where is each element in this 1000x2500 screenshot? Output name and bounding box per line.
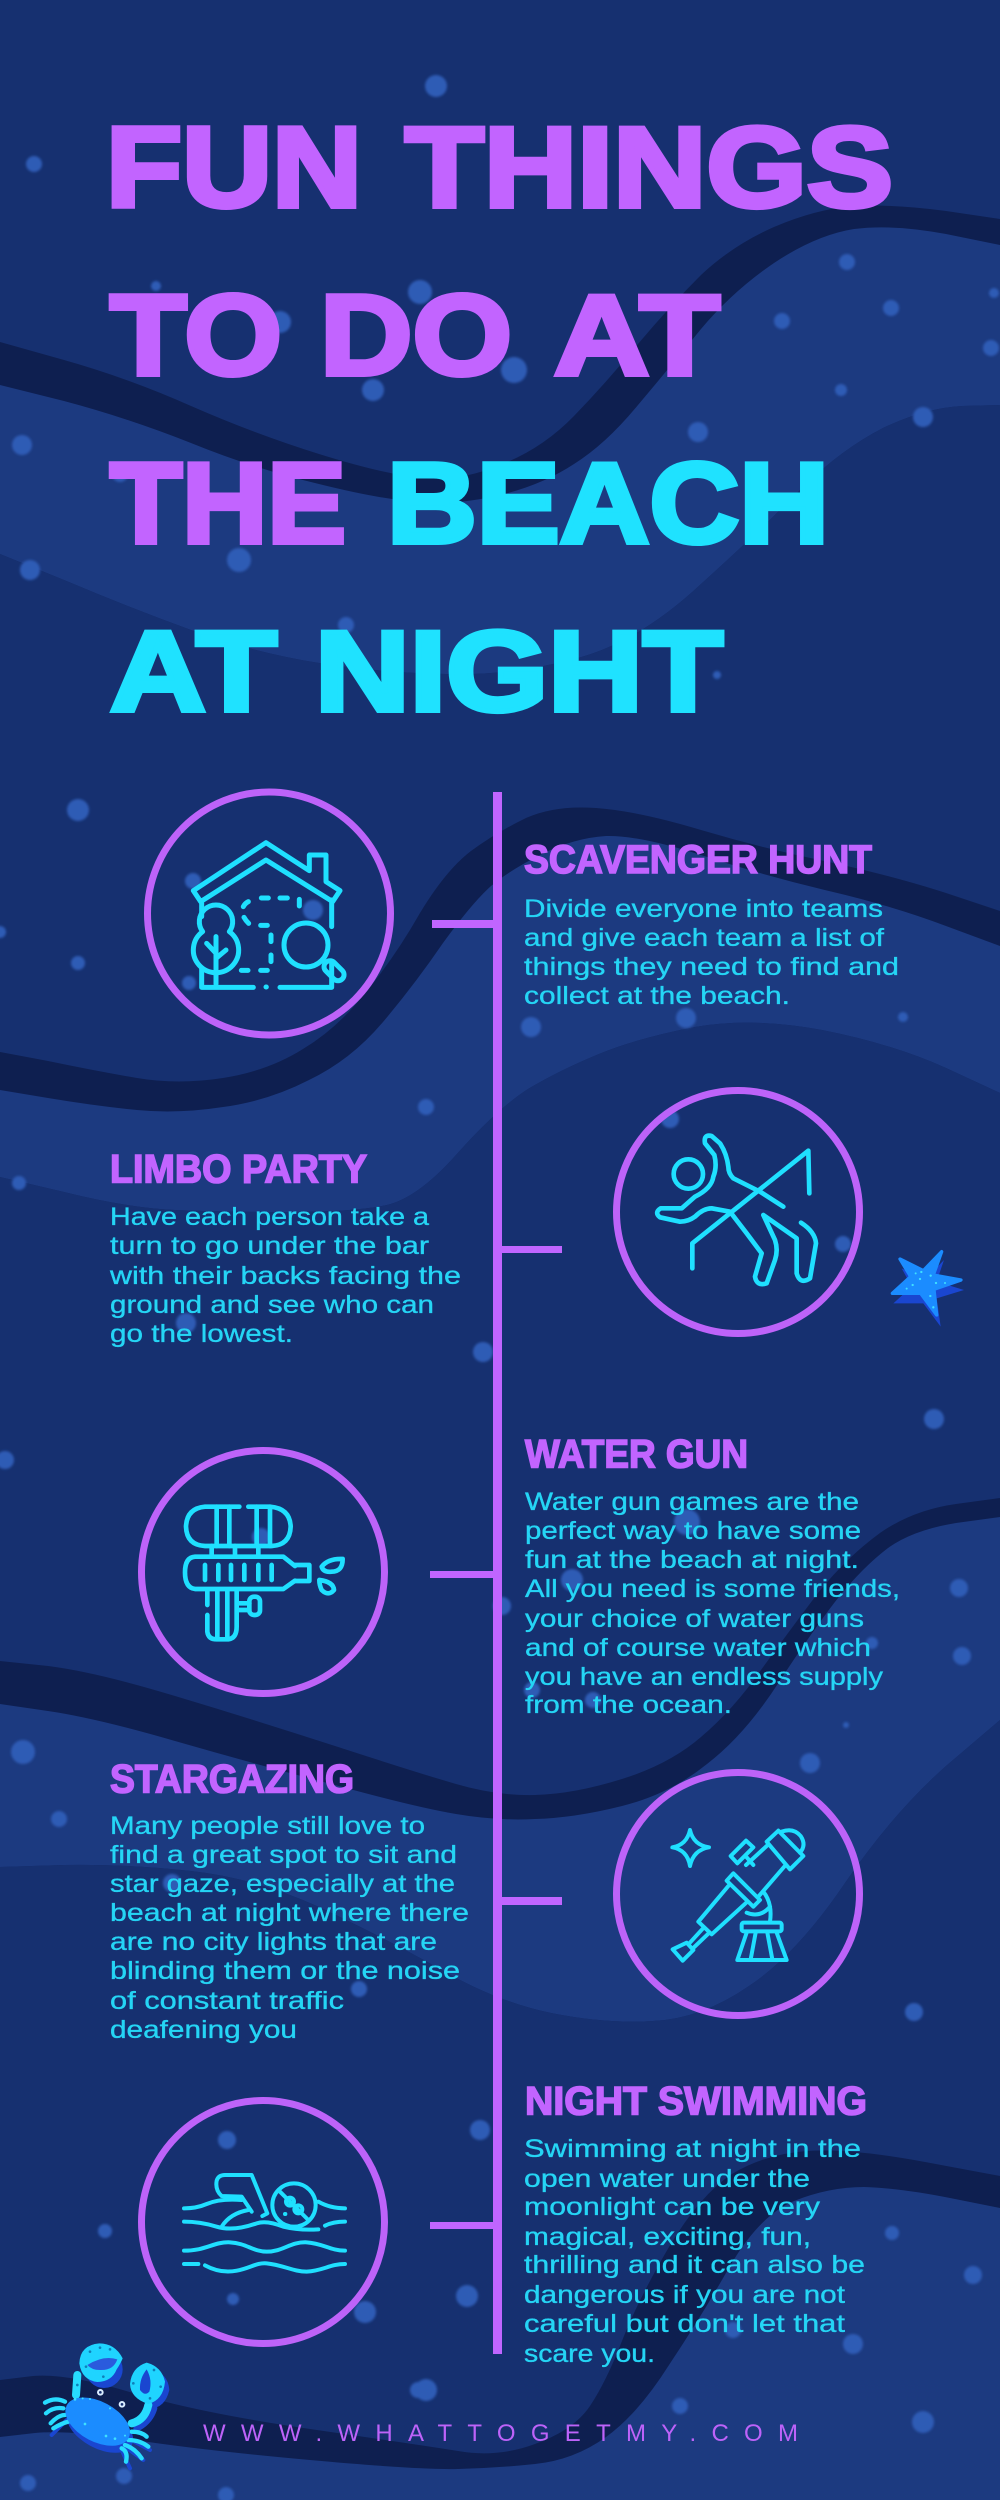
icon: telescope and star: [616, 1772, 860, 2016]
panel: scavenger hunt: [148, 792, 899, 1035]
title: AT: [554, 272, 720, 400]
panel: limbo party: [109, 1090, 860, 1348]
body text: fun at the beach at night.: [525, 1546, 859, 1574]
icon: swimmer: [142, 2100, 384, 2344]
panel: stargazing: [110, 1758, 860, 2044]
body text: things they need to find and: [524, 953, 899, 981]
heading: LIMBO PARTY: [110, 1148, 367, 1192]
icon: house with magnifier: [148, 792, 390, 1035]
title: NIGHT: [315, 608, 723, 736]
body text: collect at the beach.: [524, 982, 790, 1010]
connector: [502, 1897, 562, 1905]
body text: of constant traffic: [110, 1987, 344, 2015]
body text: [110, 1812, 469, 2044]
connector: [430, 1571, 493, 1578]
heading: SCAVENGER HUNT: [524, 838, 872, 882]
body text: and of course water which: [525, 1634, 871, 1662]
title: THINGS: [405, 104, 893, 232]
icon: water gun: [142, 1450, 384, 1694]
body text: [109, 1203, 461, 1348]
body text: All you need is some friends,: [525, 1575, 900, 1603]
body text: star gaze, especially at the: [110, 1870, 455, 1898]
body text: ground and see who can: [110, 1291, 434, 1319]
title: BEACH: [387, 440, 829, 568]
icon: crab: [45, 2343, 169, 2468]
body text: are no city lights that are: [110, 1928, 437, 1956]
body text: turn to go under the bar: [110, 1232, 429, 1260]
icon: limbo dancer: [616, 1090, 860, 1334]
body text: scare you.: [524, 2340, 655, 2368]
body text: perfect way to have some: [525, 1517, 861, 1545]
title: FUN: [106, 104, 362, 232]
body text: [524, 895, 899, 1010]
body text: from the ocean.: [525, 1691, 732, 1719]
body text: and give each team a list of: [524, 924, 884, 952]
title: TO: [110, 272, 282, 400]
connector: [502, 1246, 562, 1253]
body text: you have an endless supply: [525, 1663, 884, 1691]
body text: find a great spot to sit and: [110, 1841, 457, 1869]
connector: [430, 2222, 493, 2229]
body text: blinding them or the noise: [110, 1957, 460, 1985]
heading: WATER GUN: [525, 1432, 748, 1476]
title: DO: [320, 272, 512, 400]
body text: your choice of water guns: [525, 1605, 864, 1633]
body text: moonlight can be very: [524, 2193, 821, 2221]
body text: [524, 2135, 865, 2368]
body text: beach at night where there: [110, 1899, 469, 1927]
panel: water gun: [142, 1432, 900, 1719]
body text: Water gun games are the: [525, 1488, 859, 1516]
body text: Divide everyone into teams: [524, 895, 883, 923]
heading: NIGHT SWIMMING: [525, 2080, 867, 2124]
timeline spine: [493, 792, 502, 2354]
body text: Swimming at night in the: [524, 2135, 861, 2163]
body text: go the lowest.: [110, 1320, 293, 1348]
connector: [432, 920, 493, 928]
body text: magical, exciting, fun,: [524, 2223, 811, 2251]
body text: dangerous if you are not: [524, 2281, 845, 2309]
icon: starfish: [892, 1252, 964, 1327]
title: THE: [110, 440, 346, 568]
body text: careful but don't let that: [524, 2310, 845, 2338]
body text: thrilling and it can also be: [524, 2251, 865, 2279]
body text: Many people still love to: [110, 1812, 425, 1840]
title: AT: [110, 608, 277, 736]
panel: night swimming: [142, 2080, 867, 2368]
footer url: WWW.WHATTOGETMY.COM: [203, 2420, 798, 2447]
heading: STARGAZING: [110, 1758, 354, 1802]
body text: [525, 1488, 900, 1719]
body text: deafening you: [110, 2016, 297, 2044]
body text: with their backs facing the: [109, 1262, 461, 1290]
body text: Have each person take a: [110, 1203, 429, 1231]
title: [106, 104, 893, 736]
body text: open water under the: [524, 2165, 810, 2193]
